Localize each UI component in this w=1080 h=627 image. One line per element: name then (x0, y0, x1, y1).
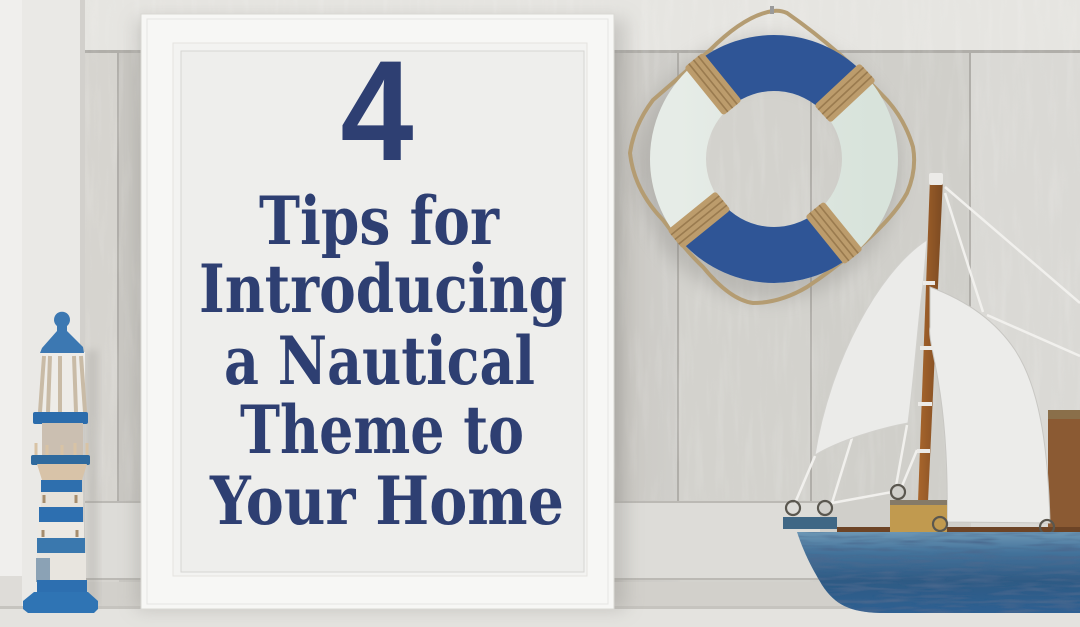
wood grain overlay (85, 0, 1080, 500)
rope band top-right (814, 63, 876, 123)
rope band bottom-left (667, 191, 731, 249)
picture frame (136, 14, 626, 610)
deck rail (837, 527, 1080, 534)
line: Theme to: Theme to (240, 391, 524, 469)
stripes (41, 480, 82, 492)
rope loop (630, 11, 914, 303)
mast (918, 178, 943, 502)
roof (40, 312, 84, 353)
icon: life ring (630, 6, 914, 303)
rope band bottom-right (805, 201, 863, 265)
bow block (783, 517, 837, 529)
ring body (678, 63, 870, 255)
rigging rings (786, 485, 1054, 534)
line: a Nautical: a Nautical (224, 322, 535, 400)
line: Introducing: Introducing (199, 250, 567, 328)
blue segments (714, 63, 844, 94)
frame inner panel (181, 51, 584, 572)
line: Your Home: Your Home (209, 462, 564, 540)
hull (797, 532, 1080, 613)
gallery band (33, 412, 88, 424)
front sail (815, 240, 927, 455)
cabin at right (1048, 410, 1080, 532)
base (37, 580, 87, 593)
title text (199, 32, 567, 540)
icon: lighthouse (23, 312, 98, 613)
tower wall (42, 423, 83, 457)
big number 4: 4 (340, 32, 414, 191)
icon: sailboat (783, 173, 1080, 613)
deck box (890, 500, 947, 534)
mast bands (917, 283, 935, 451)
line: Tips for: Tips for (259, 182, 500, 260)
rope band top-left (684, 52, 742, 116)
main sail (930, 287, 1050, 523)
lantern room (41, 352, 85, 413)
rigging lines (795, 187, 1080, 503)
